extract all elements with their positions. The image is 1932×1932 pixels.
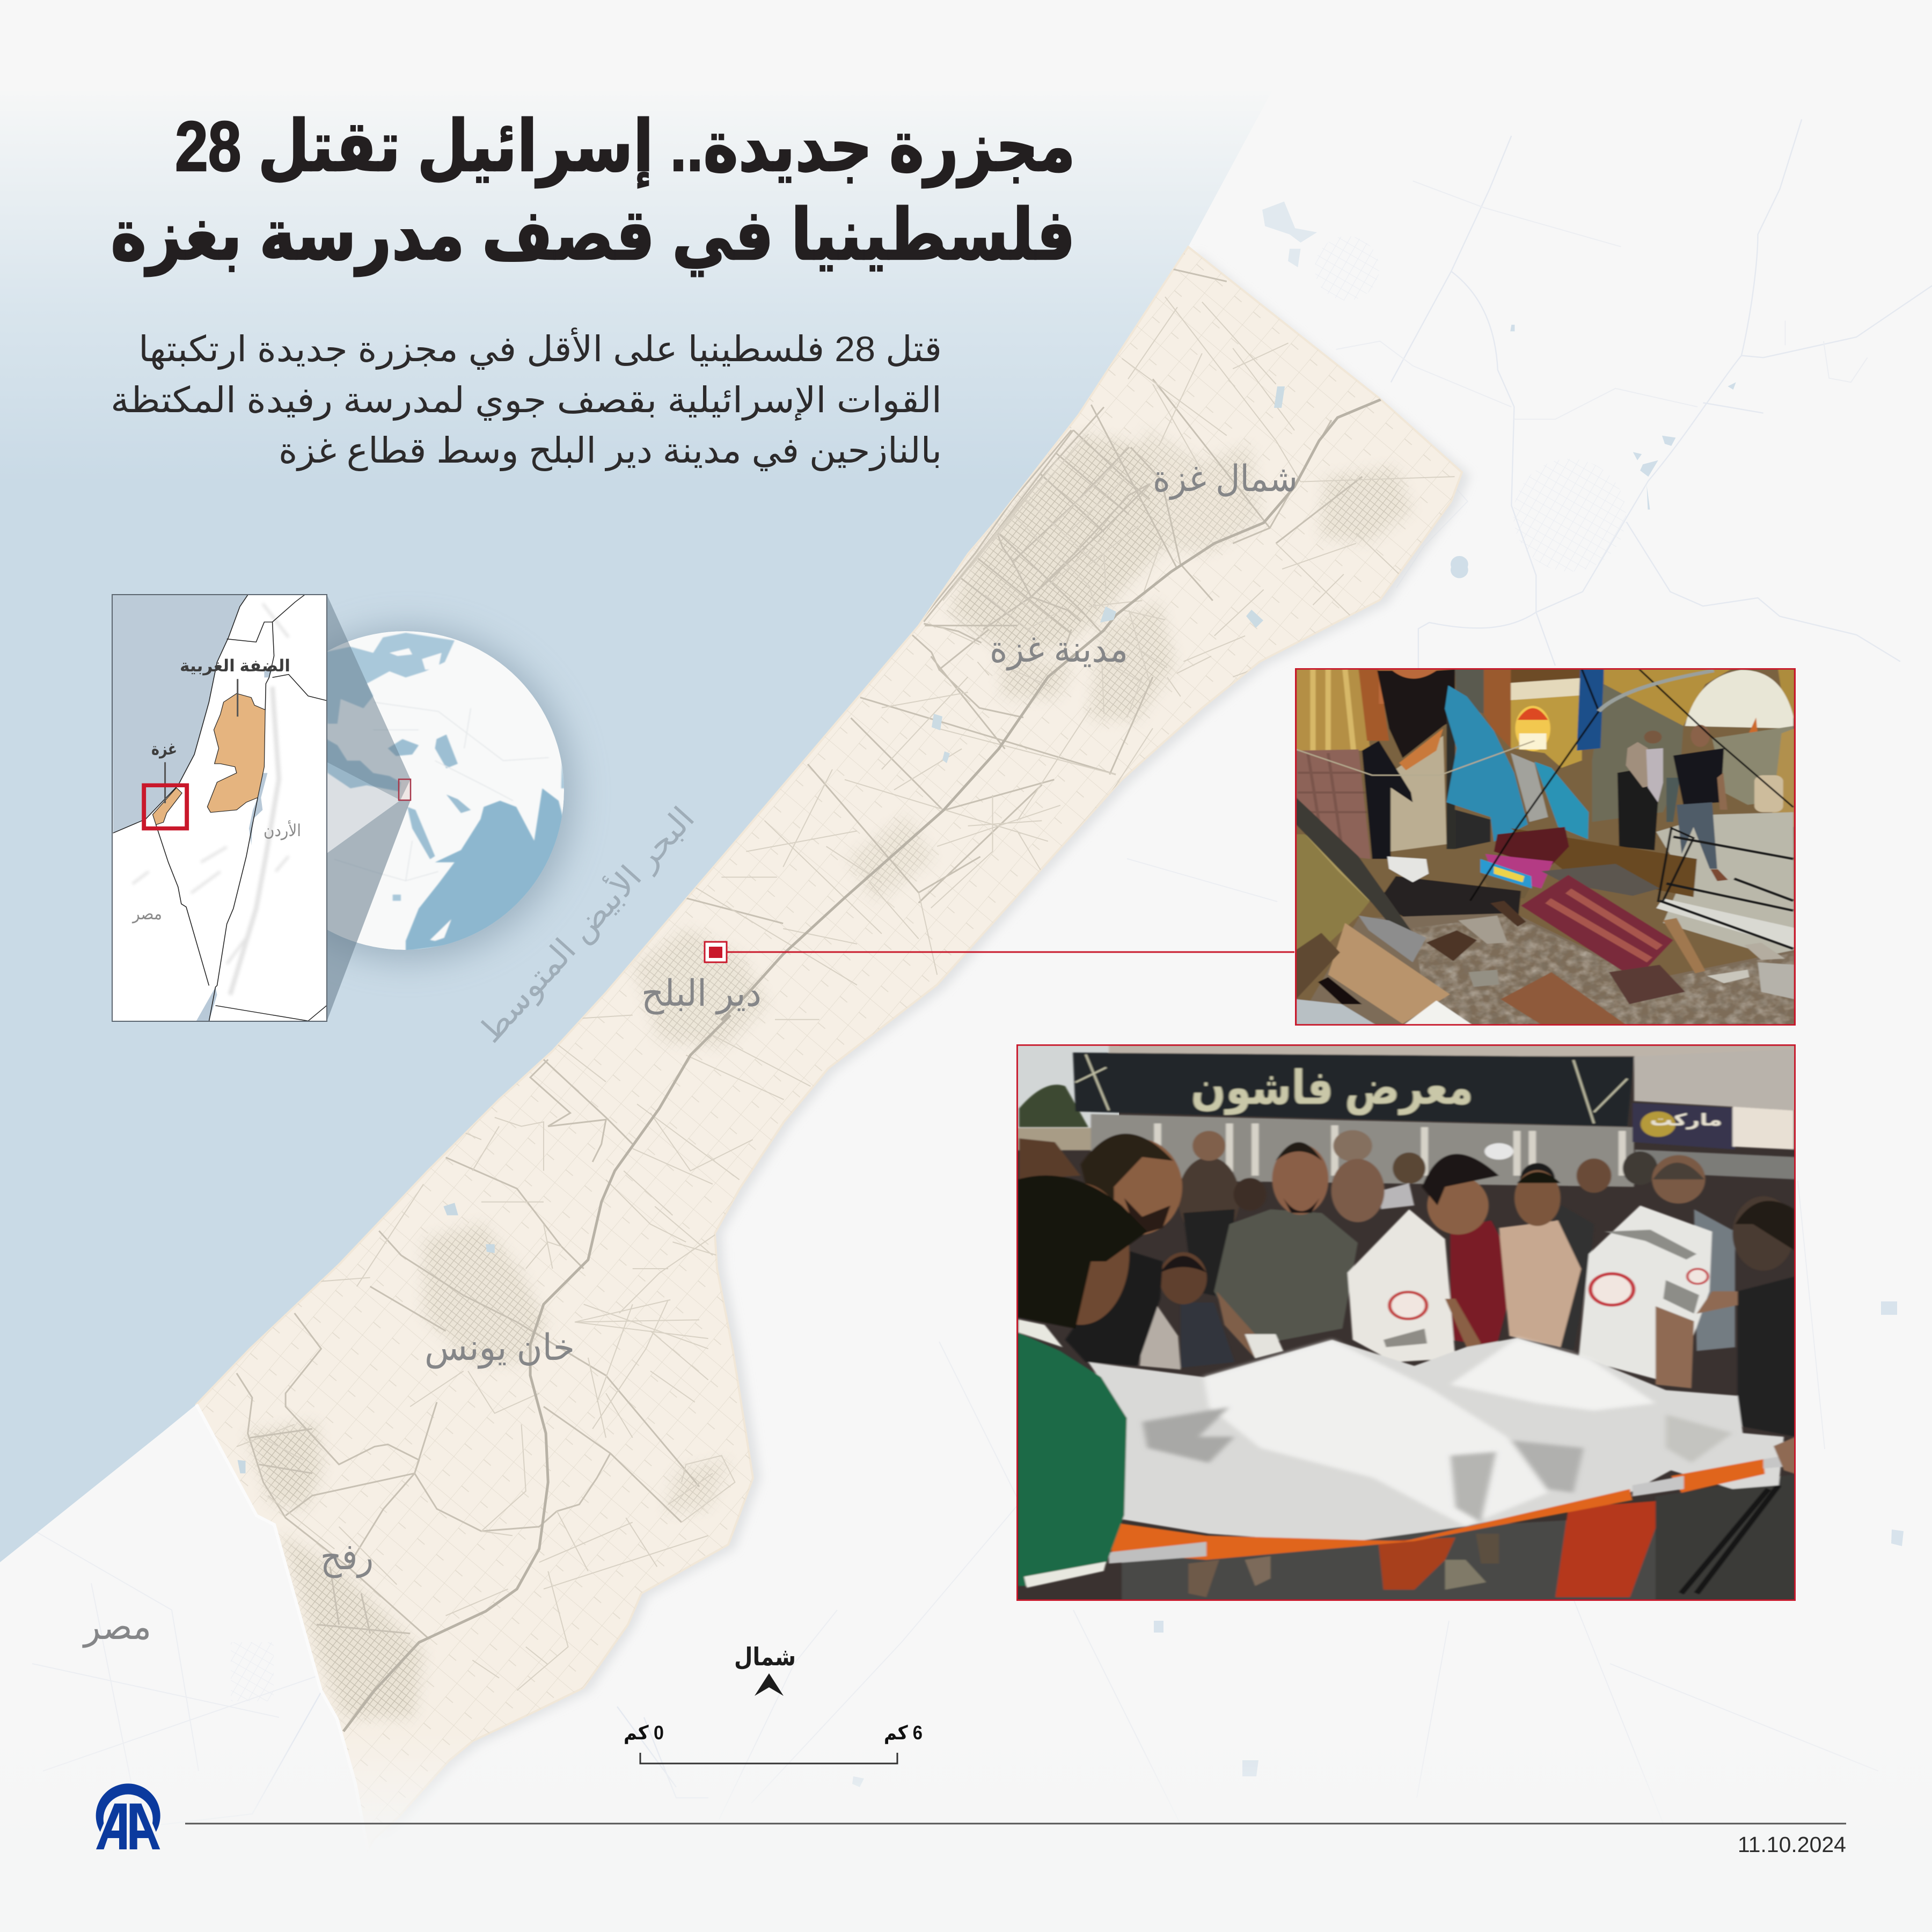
- strike location marker and connector: [705, 942, 1294, 962]
- date: 11.10.2024: [1738, 1832, 1846, 1857]
- scale bar: [624, 1722, 923, 1763]
- bottom fade of the map: [0, 1733, 1932, 1862]
- Egypt border white line: [196, 1404, 368, 1850]
- Gaza Strip landmass: [195, 245, 1463, 1823]
- place labels: دير البلح: [641, 973, 762, 1015]
- globe shadow: [241, 628, 574, 961]
- north arrow: شمال: [734, 1643, 796, 1671]
- title: مجزرة جديدة.. إسرائيل تقتل 28: [175, 107, 1075, 188]
- globe locator: [245, 631, 565, 951]
- photo: paramedics carrying body bag: [1016, 1044, 1796, 1601]
- inset labels: مصر: [131, 904, 162, 924]
- body text: قتل 28 فلسطينيا على الأقل في مجزرة جديدة ارتكبتها: [138, 327, 942, 370]
- projection cone: [327, 595, 411, 1021]
- photo: damaged school interior: [1295, 668, 1796, 1026]
- place labels: مصر: [82, 1606, 151, 1648]
- north arrow: [734, 1643, 796, 1696]
- title: فلسطينيا في قصف مدرسة بغزة: [111, 195, 1075, 276]
- place labels: رفح: [320, 1536, 374, 1578]
- faint roads: lower east and Egypt: [32, 859, 1904, 1825]
- urban fabric: [0, 215, 1503, 1825]
- place labels: خان يونس: [425, 1327, 575, 1369]
- footer rule: [185, 1823, 1846, 1825]
- body text: القوات الإسرائيلية بقصف جوي لمدرسة رفيدة المكتظة: [111, 380, 942, 421]
- roads: south: [237, 1006, 819, 1731]
- title: [111, 107, 1075, 276]
- globe locator square: [399, 779, 411, 800]
- photo: paramedics carrying body bag: ماركت: [1650, 1110, 1722, 1129]
- sparse field roads: [0, 215, 1503, 1825]
- AA logo: [96, 1783, 160, 1849]
- place labels: شمال غزة: [1153, 458, 1298, 500]
- Mediterranean sea: [0, 91, 1272, 1562]
- footer background: [0, 1862, 1932, 1932]
- sea label: البحر الأبيض المتوسط: [471, 799, 702, 1050]
- place labels: مدينة غزة: [990, 629, 1128, 671]
- inset labels: غزة: [151, 740, 177, 759]
- photo: paramedics carrying body bag: معرض فاشون: [1191, 1062, 1473, 1115]
- strip shadow: [376, 252, 1470, 1846]
- faint town networks: [231, 236, 1626, 1701]
- inset labels: الضفة الغربية: [180, 656, 290, 676]
- inset locator map: [112, 595, 327, 1022]
- roads: north and centre: [678, 266, 1455, 1020]
- scale bar: 0 كم: [624, 1722, 664, 1744]
- body text: [111, 327, 942, 471]
- roads: Gaza City grid: [912, 407, 1213, 718]
- faint neighbouring roads and water: [1262, 119, 1932, 670]
- scale bar: 6 كم: [884, 1722, 923, 1744]
- inset labels: [131, 656, 301, 924]
- inset labels: الأردن: [264, 820, 301, 840]
- body text: بالنازحين في مدينة دير البلح وسط قطاع غزة: [279, 430, 942, 471]
- place labels: [82, 458, 1298, 1648]
